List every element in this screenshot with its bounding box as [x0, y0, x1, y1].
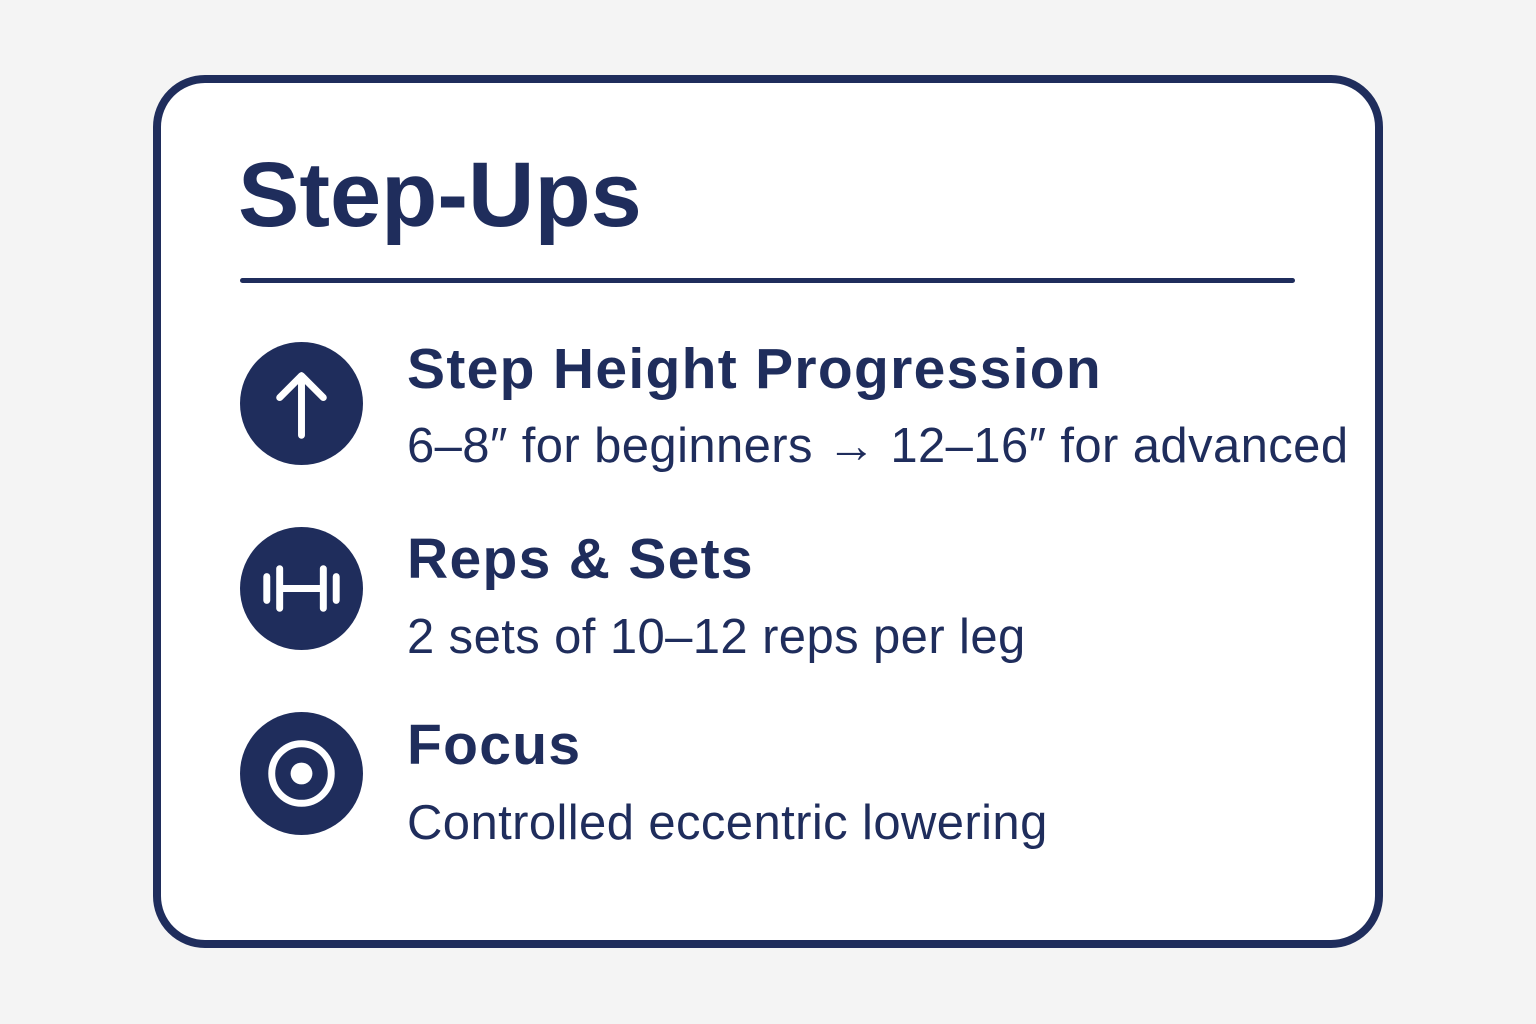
icon: up arrow: [240, 342, 363, 465]
panel: card: [153, 75, 1383, 948]
heading: reps: Reps & Sets: [407, 527, 754, 591]
icon: target: [240, 712, 363, 835]
text: focus: Controlled eccentric lowering: [407, 796, 1048, 850]
text: reps: 2 sets of 10–12 reps per leg: [407, 610, 1026, 664]
heading: focus: Focus: [407, 713, 581, 777]
heading: step height: Step Height Progression: [407, 337, 1102, 401]
title: Step-Ups: [238, 144, 642, 246]
text: step height: 6–8″ for beginners → 12–16″ for advanced: [407, 419, 1348, 473]
icon: dumbbell: [240, 527, 363, 650]
